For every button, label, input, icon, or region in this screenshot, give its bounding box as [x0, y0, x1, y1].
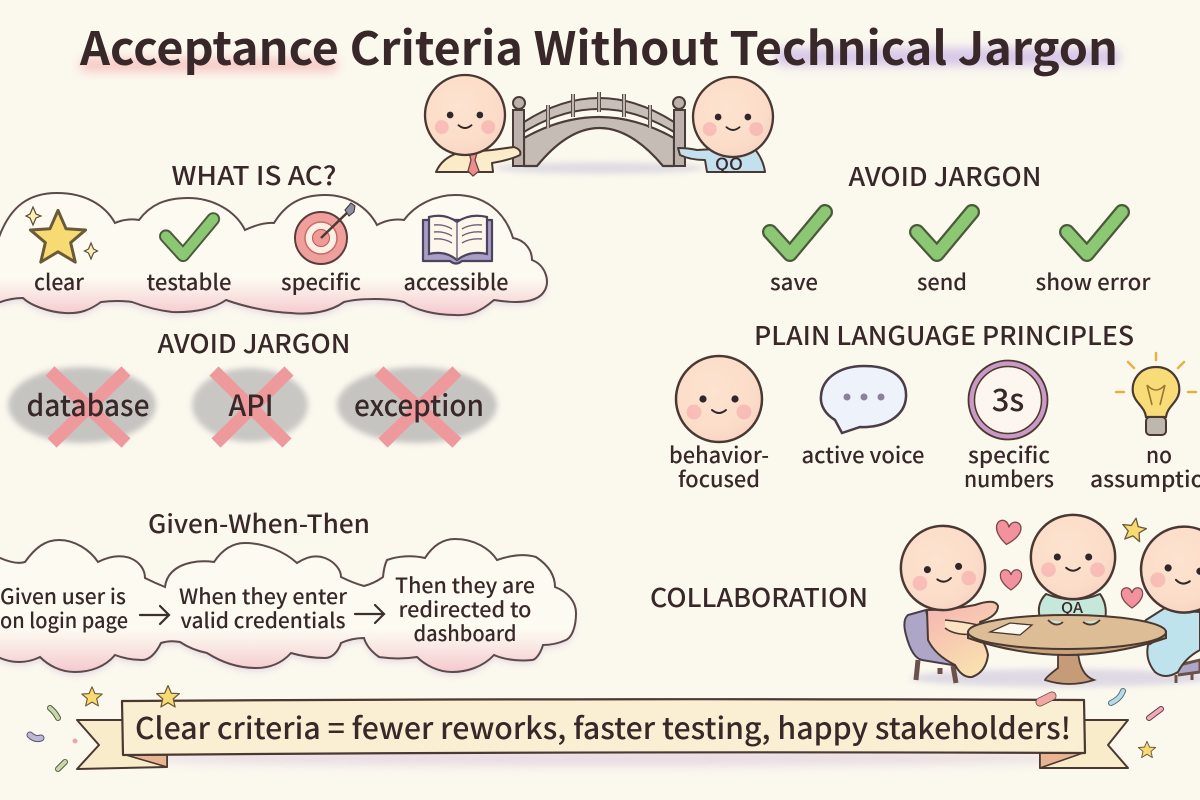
label: accessible: accessible: [404, 265, 508, 297]
item: active voice: [802, 366, 924, 470]
item: specific numbers: [964, 360, 1054, 494]
right character: QO: [715, 150, 743, 175]
label: specific: specific: [281, 265, 361, 297]
confetti: [30, 686, 1161, 769]
step: given: Given user is: [0, 581, 126, 611]
hearts and stars: [994, 516, 1148, 608]
heading: avoid jargon right: AVOID JARGON: [848, 157, 1042, 194]
step: when: valid credentials: [180, 605, 346, 635]
item: send: send: [917, 265, 967, 297]
step: when: [179, 581, 347, 635]
item: save: save: [770, 265, 818, 297]
icon: open book: [423, 216, 492, 264]
banner: [30, 686, 1161, 769]
step: given: [0, 581, 128, 635]
arrow: [140, 606, 169, 624]
heading: what is AC: WHAT IS AC?: [172, 156, 336, 193]
middle person: QA: [1061, 597, 1084, 618]
middle person: [1031, 515, 1115, 624]
item: specific numbers: numbers: [964, 462, 1054, 494]
table: [968, 615, 1166, 684]
panel: principles: [669, 353, 1200, 494]
illustration: team around table: [897, 515, 1200, 687]
word: database: [26, 371, 150, 443]
word: API: [214, 371, 289, 443]
item: no assumptions: [1090, 353, 1200, 494]
panel: what is AC cloud: [0, 193, 558, 319]
ribbon body: [122, 699, 1085, 755]
icon: star: [26, 207, 98, 262]
panel: given-when-then cloud: [0, 539, 578, 676]
item: behavior-focused: [669, 356, 769, 494]
message: Clear criteria = fewer reworks, faster testing, happy stakeholders!: [135, 704, 1071, 748]
title: Acceptance Criteria Without Technical Jargon: [79, 13, 1118, 79]
ribbon tails: [77, 720, 1128, 769]
hands on table: [1048, 620, 1100, 625]
icon: bridge with two characters: [425, 75, 773, 176]
left chair: [904, 610, 958, 683]
item: send: [917, 212, 972, 297]
step: given: on login page: [0, 605, 128, 635]
heading: plain language principles: PLAIN LANGUAGE PRINCIPLES: [754, 316, 1134, 353]
panel: good words: [770, 212, 1152, 297]
heading: avoid jargon left: AVOID JARGON: [158, 324, 350, 361]
word: exception: [354, 371, 484, 443]
right chair: [1175, 660, 1200, 683]
step: then: [395, 570, 535, 648]
heading: Given-When-Then: Given-When-Then: [148, 505, 370, 541]
item: specific numbers: specific: [968, 438, 1050, 470]
item: save: [770, 212, 825, 297]
step: then: dashboard: [414, 618, 516, 648]
bridge: [513, 92, 685, 166]
item: show error: show error: [1036, 265, 1152, 297]
right character: [678, 77, 773, 175]
word: exception: exception: [354, 383, 484, 425]
item: active voice: active voice: [802, 438, 924, 470]
step: when: When they enter: [179, 581, 347, 611]
step: then: Then they are: [395, 570, 535, 600]
step: then: redirected to: [398, 594, 532, 624]
label: clear: clear: [34, 265, 85, 297]
label: testable: testable: [146, 265, 232, 297]
item: show error: [1036, 212, 1152, 297]
panel: crossed-out jargon: [8, 367, 497, 443]
arrow: [355, 605, 384, 623]
left character: [425, 75, 520, 176]
right person: [1137, 522, 1200, 676]
item: behavior-focused: focused: [678, 462, 760, 494]
item: specific numbers: 3s: [992, 375, 1024, 420]
item: no assumptions: no: [1146, 438, 1172, 470]
icon: target: [295, 203, 355, 264]
item: behavior-focused: behavior-: [669, 438, 769, 470]
word: database: database: [26, 383, 150, 425]
left person: [897, 522, 998, 677]
icon: check: [166, 219, 213, 255]
word: API: API: [228, 383, 274, 425]
heading: collaboration: COLLABORATION: [650, 578, 868, 615]
